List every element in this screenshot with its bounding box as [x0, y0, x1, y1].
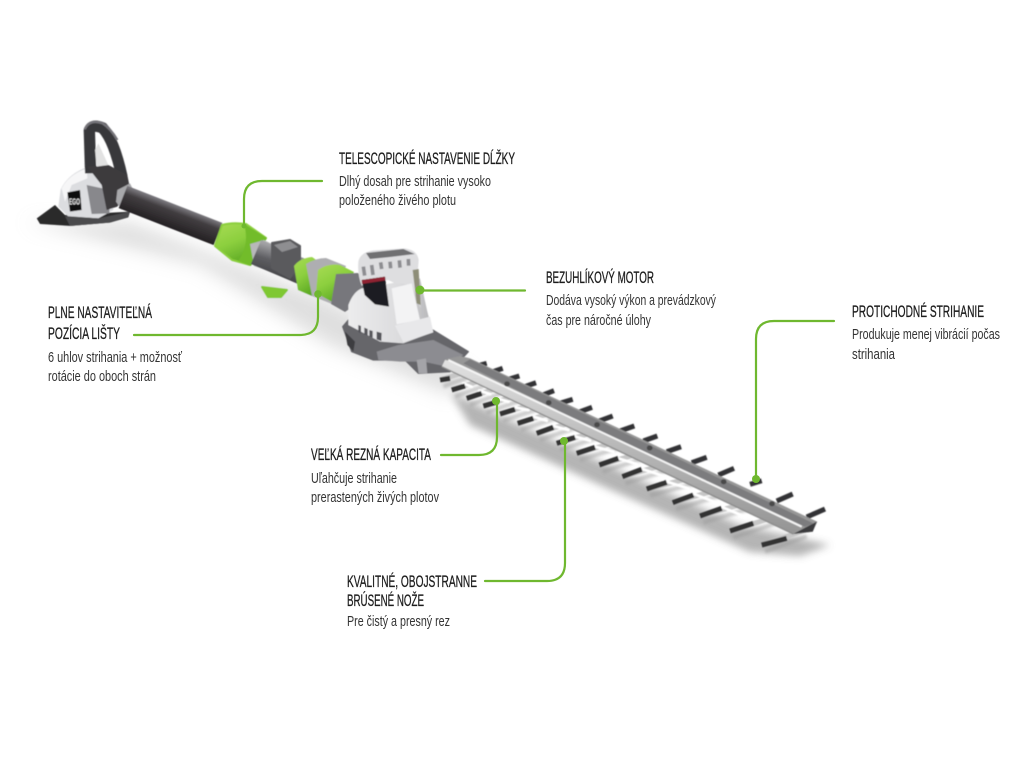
description: Uľahčuje strihanie	[311, 470, 397, 487]
green telescopic collar	[215, 223, 284, 272]
description: položeného živého plotu	[339, 192, 456, 209]
description	[311, 470, 439, 506]
description	[852, 326, 1000, 363]
leader: cutting capacity	[441, 397, 500, 455]
gearbox base	[343, 320, 468, 373]
heading: KVALITNÉ, OBOJSTRANNE	[347, 572, 477, 591]
lower teeth	[440, 373, 807, 551]
heading	[347, 572, 477, 610]
description: strihania	[852, 346, 895, 363]
rear handle unit: EGO	[69, 197, 80, 206]
description: 6 uhlov strihania + možnosť	[48, 349, 182, 366]
description	[339, 173, 491, 209]
heading: POZÍCIA LIŠTY	[48, 324, 120, 343]
description	[546, 292, 716, 329]
rear handle unit	[37, 122, 133, 226]
description: Pre čistý a presný rez	[347, 613, 450, 630]
heading	[48, 303, 152, 343]
leader: telescopic adjustment	[242, 181, 322, 228]
leader: blades	[485, 437, 568, 581]
description: prerastených živých plotov	[311, 489, 439, 506]
callout: quality blades	[347, 572, 477, 630]
callout: adjustable blade position	[48, 303, 182, 385]
leader: brushless motor	[416, 286, 525, 294]
callout: large cutting capacity	[311, 445, 439, 506]
motor housing	[348, 248, 433, 343]
callout: counter-rotating cutting	[852, 302, 1000, 363]
spine	[442, 356, 817, 534]
description: rotácie do oboch strán	[48, 368, 156, 385]
description	[48, 349, 182, 385]
description: čas pre náročné úlohy	[546, 312, 651, 329]
ground shadows	[25, 222, 830, 556]
heading: PLNE NASTAVITEĽNÁ	[48, 303, 152, 322]
lower shaft with clamp	[256, 240, 374, 312]
callout: telescopic adjustment	[339, 149, 515, 209]
cutting blade	[440, 356, 825, 551]
description: Dodáva vysoký výkon a prevádzkový	[546, 292, 716, 309]
callout: brushless motor	[546, 268, 716, 329]
product: pole hedge trimmer	[25, 122, 830, 556]
upper teeth	[477, 363, 825, 517]
description: Dlhý dosah pre strihanie vysoko	[339, 173, 491, 190]
heading: VEĽKÁ REZNÁ KAPACITA	[311, 445, 431, 464]
leader: blade position	[134, 290, 322, 335]
leader: counter-rotating	[752, 321, 834, 483]
telescopic pole	[123, 197, 218, 234]
heading: BEZUHLÍKOVÝ MOTOR	[546, 268, 654, 287]
heading: BRÚSENÉ NOŽE	[347, 591, 424, 610]
heading: TELESCOPICKÉ NASTAVENIE DĹŽKY	[339, 149, 515, 168]
